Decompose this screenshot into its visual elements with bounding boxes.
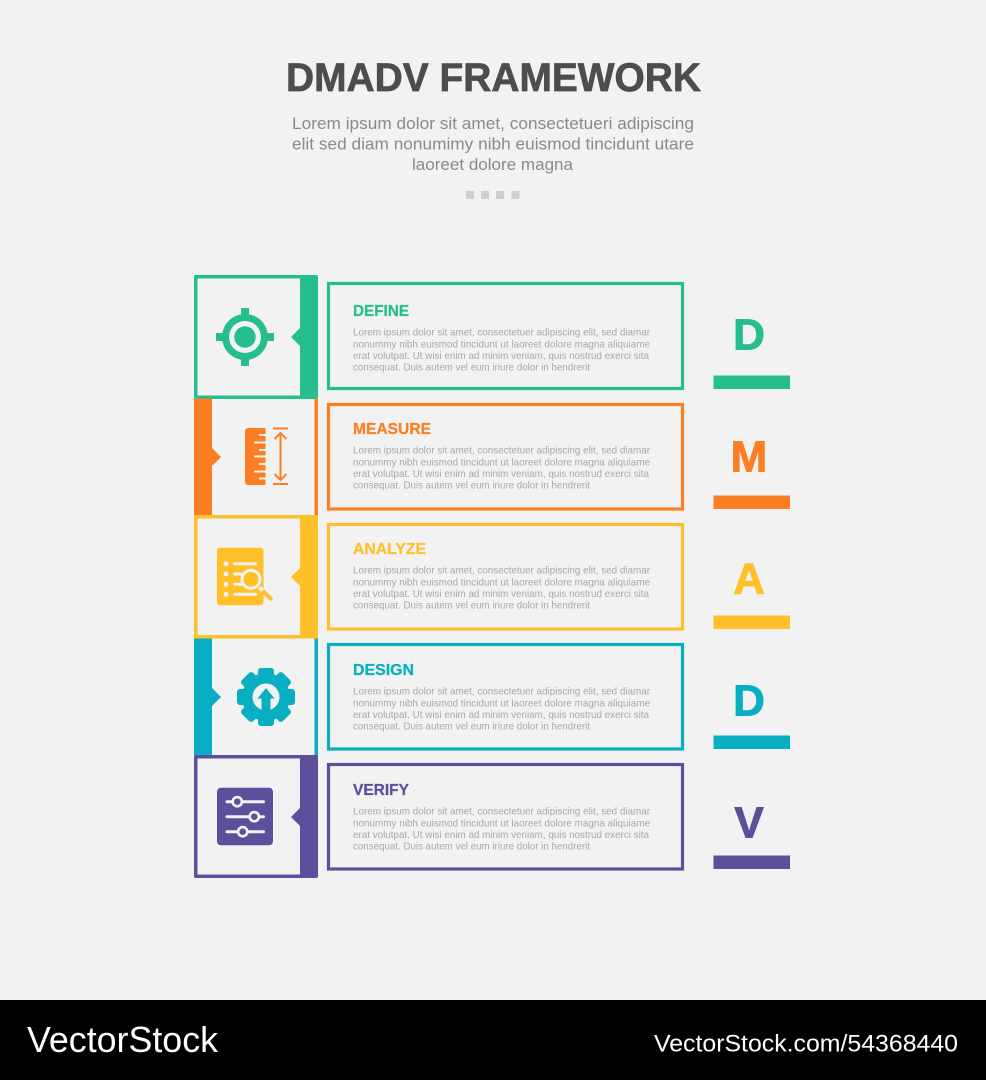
body text: design: nonummy nibh euismod tincidunt ut laoreet dolore magna aliquiame [353,698,650,709]
panel: analyze text box [328,524,682,629]
icon: sliders [217,788,273,845]
body text: define: nonummy nibh euismod tincidunt ut laoreet dolore magna aliquiame [353,339,650,350]
body text: measure [353,446,650,492]
body text: measure: nonummy nibh euismod tincidunt ut laoreet dolore magna aliquiame [353,457,650,468]
panel: analyze tab [194,515,318,638]
icon: document with magnifier [217,548,272,605]
letter M with bar: M [731,432,767,482]
panel: define tab [194,275,318,399]
footer url text: VectorStock.com/54368440 [654,1030,958,1058]
body text: design: consequat. Duis autem vel eum iriure dolor in hendrerit [353,722,590,733]
panel: measure text box [328,404,682,509]
body text: analyze: consequat. Duis autem vel eum iriure dolor in hendrerit [353,601,590,612]
body text: define: erat volutpat. Ut wisi enim ad minim veniam, quis nostrud exerci sita [353,351,649,362]
body text: verify [353,806,650,853]
letter V with bar [714,798,790,869]
heading: verify: VERIFY [353,782,409,799]
body text: define [353,328,650,374]
body text: verify: consequat. Duis autem vel eum iriure dolor in hendrerit [353,842,590,853]
body text: measure: consequat. Duis autem vel eum iriure dolor in hendrerit [353,481,590,492]
panel: design text box [328,644,682,749]
body text: analyze [353,566,650,612]
body text: verify: erat volutpat. Ut wisi enim ad minim veniam, quis nostrud exerci sita [353,830,649,841]
subtitle text block: laoreet dolore magna [412,155,574,174]
body text: design: erat volutpat. Ut wisi enim ad minim veniam, quis nostrud exerci sita [353,710,649,721]
heading: analyze: ANALYZE [353,541,426,558]
body text: analyze: Lorem ipsum dolor sit amet, consectetuer adipiscing elit, sed diamar [353,566,650,576]
body text: verify: Lorem ipsum dolor sit amet, consectetuer adipiscing elit, sed diamar [353,806,650,818]
body text: define: Lorem ipsum dolor sit amet, consectetuer adipiscing elit, sed diamar [353,328,650,338]
letter D with bar: D [733,310,765,360]
title dots [466,191,520,199]
icon: gear with up arrow [237,668,295,726]
title: DMADV FRAMEWORK [286,56,701,100]
body text: design: Lorem ipsum dolor sit amet, consectetuer adipiscing elit, sed diamar [353,686,650,698]
subtitle text block: Lorem ipsum dolor sit amet, consectetueri adipiscing [292,114,694,133]
letter D with bar [714,310,790,389]
letter M with bar [714,432,790,509]
body text: verify: nonummy nibh euismod tincidunt ut laoreet dolore magna aliquiame [353,818,650,829]
panel: verify text box [328,764,682,869]
subtitle text block [292,114,694,174]
letter A with bar [714,554,790,629]
body text: analyze: nonummy nibh euismod tincidunt ut laoreet dolore magna aliquiame [353,577,650,588]
heading: define: DEFINE [353,303,409,320]
letter A with bar: A [733,554,765,604]
footer logo text: VectorStock [27,1019,219,1060]
body text: define: consequat. Duis autem vel eum iriure dolor in hendrerit [353,363,590,374]
heading: design: DESIGN [353,662,414,679]
body text: analyze: erat volutpat. Ut wisi enim ad minim veniam, quis nostrud exerci sita [353,589,649,600]
panel: define text box [328,284,682,388]
letter D with bar [714,676,790,749]
icon: target [216,308,274,366]
body text: design [353,686,650,733]
footer bar [0,1000,986,1080]
heading: measure: MEASURE [353,421,431,438]
panel: design tab [194,638,318,756]
body text: measure: Lorem ipsum dolor sit amet, consectetuer adipiscing elit, sed diamar [353,446,650,456]
panel: verify tab [194,755,318,878]
letter V with bar: V [734,798,764,848]
subtitle text block: elit sed diam nonumimy nibh euismod tincidunt utare [292,134,694,154]
body text: measure: erat volutpat. Ut wisi enim ad minim veniam, quis nostrud exerci sita [353,469,649,480]
icon: ruler and height arrow [245,428,288,485]
panel: measure tab [194,398,318,516]
letter D with bar: D [733,676,765,726]
